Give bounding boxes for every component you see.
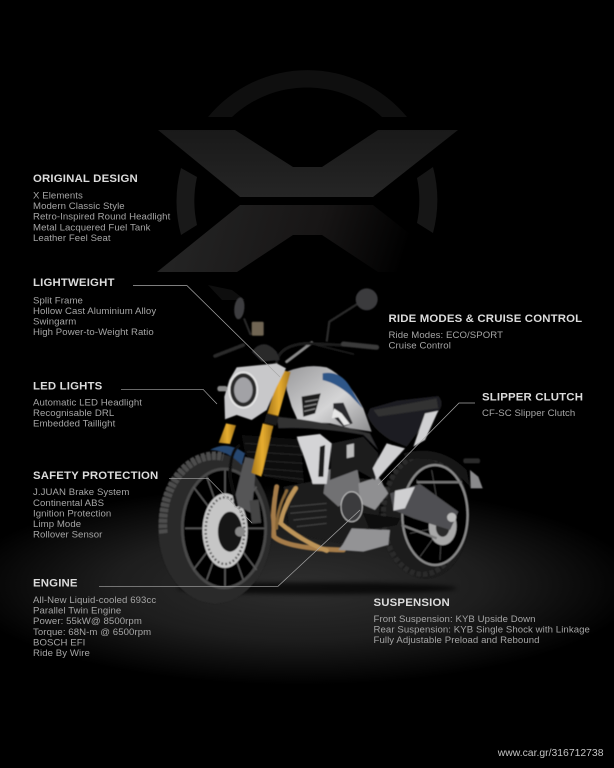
feature list: Ride By Wire [33, 648, 90, 659]
panel: safety protection [33, 470, 158, 541]
heading: ORIGINAL DESIGN [33, 173, 138, 185]
feature list: CF-SC Slipper Clutch [482, 408, 575, 419]
feature list: J.JUAN Brake System [33, 487, 129, 498]
panel: suspension [374, 597, 590, 646]
feature list: Swingarm [33, 316, 76, 328]
front fender [210, 446, 245, 465]
headlight assembly [217, 363, 286, 420]
feature list: Automatic LED Headlight [33, 398, 142, 408]
feature list: Front Suspension: KYB Upside Down [374, 614, 536, 625]
feature list: BOSCH EFI [33, 637, 85, 648]
gold forks [219, 370, 291, 477]
leader lines [99, 286, 475, 586]
feature list: Fully Adjustable Preload and Rebound [374, 635, 540, 646]
feature list: Modern Classic Style [33, 201, 125, 212]
feature list: High Power-to-Weight Ratio [33, 327, 154, 338]
feature list: Rear Suspension: KYB Single Shock with Linkage [374, 625, 590, 636]
rear wheel [383, 452, 469, 578]
feature list: Cruise Control [388, 340, 451, 351]
heading: LED LIGHTS [33, 380, 103, 392]
motorcycle [158, 288, 483, 603]
lightweight leader [133, 286, 280, 377]
emblem X bottom [157, 205, 458, 272]
feature list: Metal Lacquered Fuel Tank [33, 222, 151, 233]
panel: slipper clutch [482, 392, 583, 419]
feature list: Embedded Taillight [33, 419, 116, 430]
panel: original design [33, 173, 171, 244]
source watermark: www.car.gr/316712738 [497, 748, 604, 759]
engine leader [99, 510, 360, 586]
feature list: Split Frame [33, 295, 83, 306]
left mirror [233, 297, 251, 335]
seat [367, 396, 442, 447]
panel: LED lights [33, 380, 142, 430]
feature list: Hollow Cast Aluminium Alloy [33, 306, 156, 317]
feature list: X Elements [33, 190, 83, 202]
heading: SAFETY PROTECTION [33, 470, 158, 482]
exhaust headers [273, 487, 343, 551]
fuel tank [277, 366, 378, 450]
heading: SLIPPER CLUTCH [482, 392, 583, 404]
panel: ride modes and cruise control [388, 313, 582, 351]
feature list: Limp Mode [33, 519, 81, 530]
handlebars and controls [215, 343, 377, 362]
feature list: Continental ABS [33, 498, 104, 509]
heading: RIDE MODES & CRUISE CONTROL [388, 313, 582, 325]
skid plate [338, 528, 390, 552]
heading: LIGHTWEIGHT [33, 277, 115, 289]
emblem ring [177, 70, 437, 300]
feature list: Rollover Sensor [33, 530, 103, 541]
heading: ENGINE [33, 578, 78, 590]
heading: SUSPENSION [374, 597, 450, 609]
chain and swingarm [390, 481, 462, 538]
feature list: Torque: 68N-m @ 6500rpm [33, 627, 151, 638]
feature list: Recognisable DRL [33, 408, 115, 419]
feature list: All-New Liquid-cooled 693cc [33, 595, 156, 606]
feature list: Ride Modes: ECO/SPORT [388, 330, 503, 341]
side frame panel [297, 434, 378, 484]
feature list: Ignition Protection [33, 508, 111, 519]
feature list: Power: 55kW@ 8500rpm [33, 616, 142, 627]
radiator [242, 435, 304, 484]
fork legs lower [230, 445, 261, 524]
emblem X top [158, 130, 458, 197]
panel: lightweight [33, 277, 156, 338]
panel: engine [33, 578, 156, 659]
front wheel [158, 453, 272, 603]
brake fluid reservoir [252, 322, 264, 336]
studio floor glow [0, 470, 614, 700]
right mirror [327, 288, 378, 342]
LED lights leader [121, 389, 217, 404]
rear frame silver panel [373, 443, 405, 480]
engine block [283, 463, 400, 543]
feature list: Parallel Twin Engine [33, 606, 121, 617]
ground shadow [177, 582, 457, 594]
safety protection leader [169, 478, 252, 523]
rear fender and tail [403, 451, 483, 488]
slipper clutch leader [378, 403, 475, 485]
feature list: Retro-Inspired Round Headlight [33, 212, 171, 223]
background X emblem [157, 70, 458, 300]
feature list: Leather Feel Seat [33, 233, 111, 244]
